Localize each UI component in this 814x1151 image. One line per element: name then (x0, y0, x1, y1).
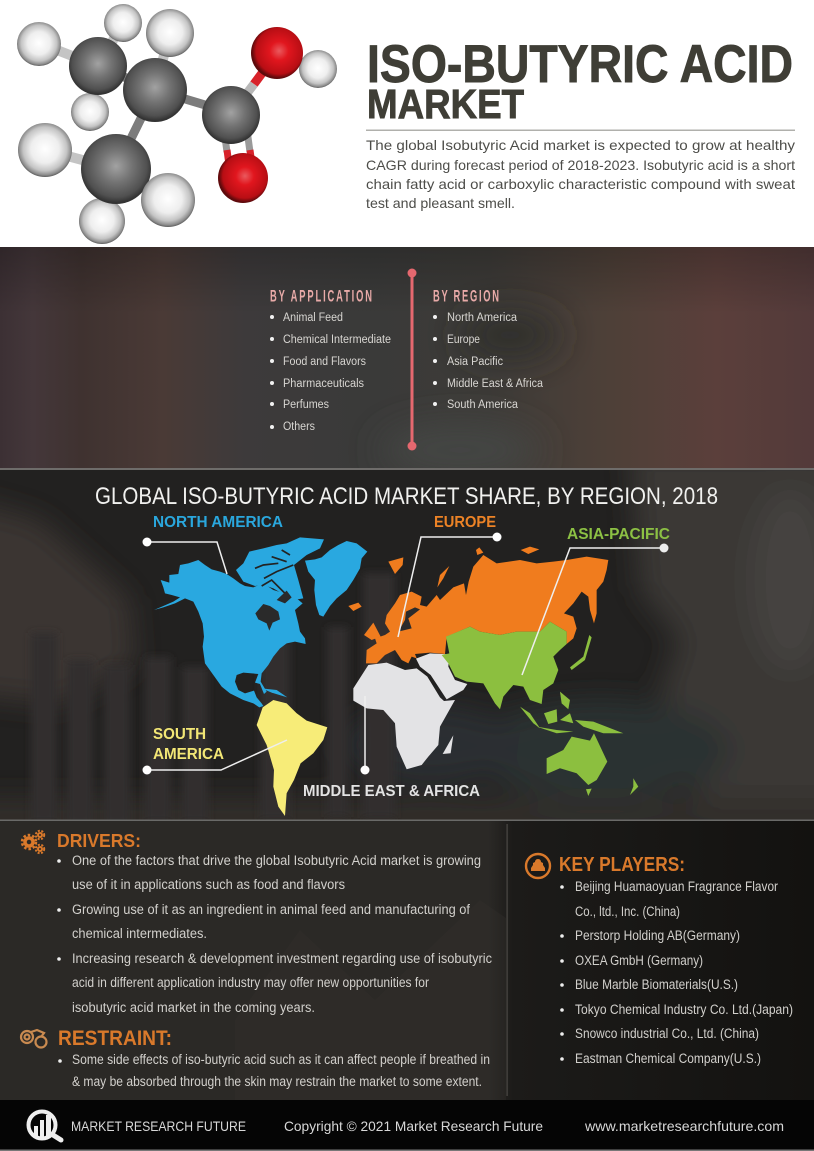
icon: market research future logo (28, 1112, 61, 1140)
title (367, 35, 793, 127)
by region list: South America (447, 399, 519, 411)
key players list (560, 879, 793, 1066)
illustration: isobutyric acid molecule (17, 4, 337, 244)
title: MARKET (367, 81, 524, 127)
by region list: North America (447, 312, 518, 324)
drivers list: use of it in applications such as food and flavors (72, 877, 345, 892)
panel: segmentation (0, 247, 814, 475)
key players list: OXEA GmbH (Germany) (575, 953, 703, 968)
by region list: BY REGION (433, 287, 499, 305)
callout: Europe: EUROPE (434, 514, 496, 531)
region: South America (257, 700, 327, 816)
by application list: BY APPLICATION (270, 287, 372, 305)
key players list: Beijing Huamaoyuan Fragrance Flavor (575, 879, 778, 894)
by region list (433, 287, 544, 411)
footer brand: MARKET RESEARCH FUTURE (71, 1118, 246, 1134)
key players list: Blue Marble Biomaterials(U.S.) (575, 977, 738, 992)
by application list (270, 287, 391, 433)
key players list: Snowco industrial Co., Ltd. (China) (575, 1026, 759, 1041)
callout: Europe (398, 514, 502, 637)
intro text block: test and pleasant smell. (366, 195, 515, 211)
key players list: Tokyo Chemical Industry Co. Ltd.(Japan) (575, 1002, 793, 1017)
callout: Middle East and Africa: MIDDLE EAST & AFRICA (303, 783, 480, 800)
region: Asia-Pacific (442, 622, 638, 796)
by application list: Chemical Intermediate (283, 334, 391, 346)
callout: Middle East and Africa (303, 696, 480, 800)
drivers list: Growing use of it as an ingredient in animal feed and manufacturing of (72, 902, 470, 917)
restraint list: & may be absorbed through the skin may restrain the market to some extent. (72, 1074, 482, 1089)
drivers list: acid in different application industry may offer new opportunities for (72, 975, 429, 990)
by application list: Animal Feed (283, 312, 343, 324)
by application list: Pharmaceuticals (283, 378, 364, 390)
icon: key players badge (526, 854, 550, 878)
restraint list (58, 1052, 490, 1089)
by application list: Perfumes (283, 399, 329, 411)
callout: South America: SOUTH (153, 726, 206, 743)
footer website: www.marketresearchfuture.com (584, 1118, 784, 1134)
key players list: Perstorp Holding AB(Germany) (575, 928, 740, 943)
callout: North America: NORTH AMERICA (153, 514, 283, 531)
callout: North America (142, 514, 283, 574)
drivers list: chemical intermediates. (72, 926, 207, 941)
callout: Asia-Pacific (522, 526, 670, 675)
by application list: Food and Flavors (283, 356, 366, 368)
region: Middle East and Africa (353, 653, 467, 769)
footer copyright: Copyright © 2021 Market Research Future (284, 1118, 543, 1134)
by application list: Others (283, 421, 315, 433)
footer (0, 1100, 814, 1151)
drivers list: isobutyric acid market in the coming years. (72, 1000, 315, 1015)
by region list: Asia Pacific (447, 356, 503, 368)
callout: Asia-Pacific: ASIA-PACIFIC (567, 526, 670, 543)
icon: handcuffs (21, 1030, 46, 1048)
callout: South America: AMERICA (153, 746, 224, 763)
drivers list: Increasing research & development investment regarding use of isobutyric (72, 951, 492, 966)
drivers list (57, 853, 492, 1015)
drivers heading: DRIVERS: (57, 831, 141, 851)
key players list: Eastman Chemical Company(U.S.) (575, 1051, 761, 1066)
restraint list: Some side effects of iso-butyric acid such as it can affect people if breathed in (72, 1052, 490, 1067)
drivers list: One of the factors that drive the global Isobutyric Acid market is growing (72, 853, 481, 868)
region: North America (154, 537, 367, 707)
by region list: Europe (447, 334, 480, 346)
restraint heading: RESTRAINT: (58, 1027, 172, 1050)
callout: South America (142, 726, 287, 774)
by region list: Middle East & Africa (447, 378, 544, 390)
intro text block (366, 137, 795, 211)
icon: gears (22, 831, 44, 853)
intro text block: The global Isobutyric Acid market is expected to grow at healthy (366, 137, 795, 153)
divider with end dots (408, 268, 416, 450)
key players list: Co., ltd., Inc. (China) (575, 904, 680, 919)
region: Europe and Russia (348, 547, 608, 663)
intro text block: chain fatty acid or carboxylic characteristic compound with sweat (366, 176, 795, 192)
key players heading: KEY PLAYERS: (559, 854, 685, 876)
panel: world map (0, 450, 814, 838)
panel: drivers, restraint and key players (0, 820, 814, 1100)
intro text block: CAGR during forecast period of 2018-2023. Isobutyric acid is a short (366, 157, 795, 173)
